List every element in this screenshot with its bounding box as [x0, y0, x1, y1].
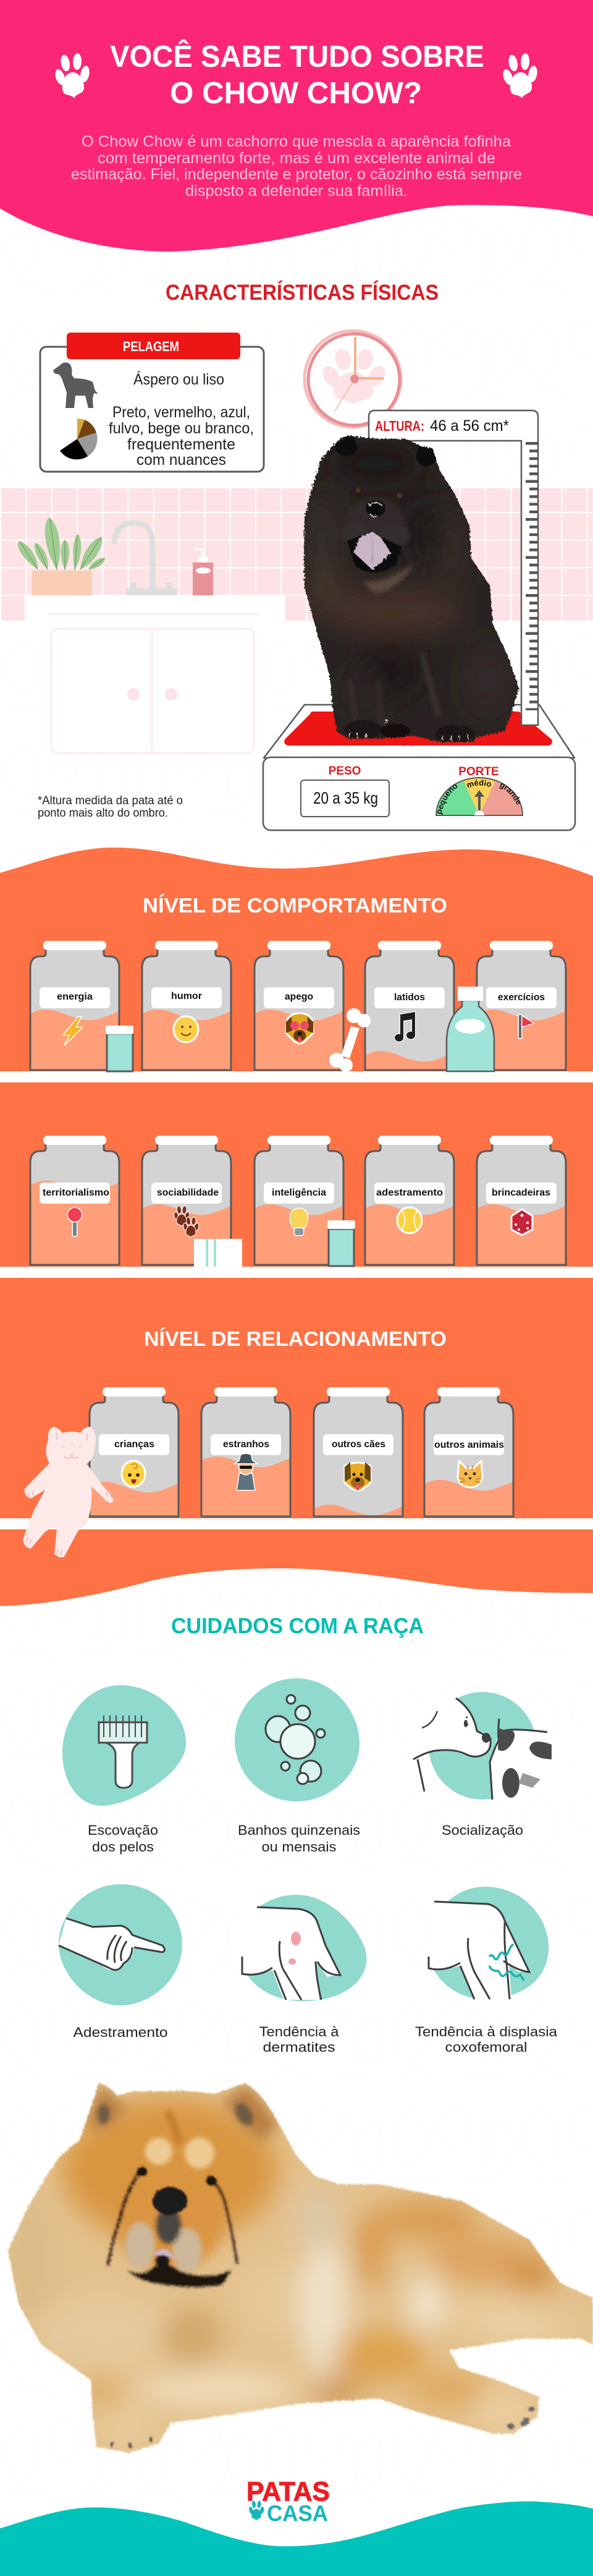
footer wave — [0, 2501, 593, 2576]
jar: estranhos — [200, 1387, 292, 1517]
jar: outros cães: outros cães — [332, 1439, 385, 1450]
title: O CHOW CHOW? — [170, 77, 422, 110]
title — [110, 40, 484, 110]
clock — [305, 331, 401, 427]
icon: flag — [519, 1015, 533, 1038]
ears — [335, 436, 357, 456]
logo: patas da casa: PATAS — [246, 2476, 330, 2507]
label: coxofemoral — [445, 2039, 528, 2055]
heading: características físicas: CARACTERÍSTICAS FÍSICAS — [166, 280, 439, 305]
label: Tendência à displasia — [415, 2024, 558, 2039]
label: dos pelos — [92, 1839, 154, 1855]
label — [238, 1822, 360, 1855]
jar: apego: apego — [285, 992, 313, 1002]
jar: outros animais: outros animais — [434, 1440, 504, 1450]
jar: brincadeiras — [476, 1136, 567, 1266]
label — [88, 1822, 158, 1855]
label: Banhos quinzenais — [238, 1822, 360, 1838]
icon: dog silhouette — [53, 362, 98, 408]
muzzle and brow folds — [117, 2181, 222, 2270]
head orange — [62, 2099, 278, 2241]
heading: cuidados com a raça: CUIDADOS COM A RAÇA — [171, 1614, 424, 1638]
scale base — [262, 704, 576, 831]
porte gauge: médio — [467, 780, 491, 788]
jar: crianças: crianças — [114, 1439, 154, 1450]
jar: latidos: latidos — [394, 992, 425, 1003]
icon: smile — [174, 1016, 198, 1042]
front leg — [334, 2329, 426, 2381]
jar: territorialismo: territorialismo — [43, 1188, 109, 1198]
icon: right paw — [500, 51, 541, 100]
bathroom wall scene — [0, 488, 593, 753]
header banner — [0, 0, 593, 252]
logo: patas da casa — [246, 2476, 330, 2526]
care: dermatite — [238, 1895, 366, 2055]
eyes — [137, 2167, 148, 2177]
decor: striped box — [194, 1239, 242, 1267]
icon: pointing hand — [59, 1918, 164, 1971]
jar: sociabilidade — [141, 1136, 232, 1266]
jar: outros animais — [424, 1387, 514, 1517]
tongue — [353, 532, 391, 570]
jar: apego — [253, 941, 345, 1071]
icon: dog face — [345, 1462, 371, 1491]
label: Escovação — [88, 1822, 158, 1838]
plant — [18, 517, 105, 595]
eyes and nose — [356, 487, 361, 493]
jar: humor: humor — [171, 991, 202, 1001]
intro paragraph: O Chow Chow é um cachorro que mescla a aparência fofinha — [82, 133, 511, 150]
colour text — [109, 404, 254, 469]
faucet — [114, 523, 177, 595]
footnote: ponto mais alto do ombro. — [38, 807, 168, 820]
icon: cat face — [458, 1461, 482, 1487]
icon: pin — [68, 1208, 82, 1236]
tongue — [153, 2249, 175, 2259]
icon: die — [511, 1209, 532, 1235]
chest tuft — [364, 563, 414, 593]
porte gauge: pequeno — [437, 784, 457, 815]
icon: left paw — [52, 51, 93, 100]
ears — [86, 2085, 278, 2142]
label: Adestramento — [73, 2025, 168, 2040]
photo: golden chow chow — [0, 2077, 593, 2460]
label — [259, 2024, 339, 2055]
colour text: com nuances — [137, 451, 226, 469]
cream band — [301, 2232, 348, 2380]
jar: exercícios: exercícios — [498, 992, 545, 1003]
icon: bulb — [290, 1209, 308, 1235]
soap bottle — [193, 548, 213, 595]
care: displasia — [415, 1887, 558, 2055]
decor: teal cup 2 — [327, 1220, 355, 1266]
footnote: *Altura medida da pata até o — [38, 794, 183, 807]
decor: bone — [329, 1008, 371, 1072]
colour text: fulvo, bege ou branco, — [109, 420, 254, 437]
footnote — [38, 794, 183, 820]
label: dermatites — [263, 2039, 335, 2055]
icon: paws — [174, 1206, 200, 1237]
decor: teddy bear — [23, 1427, 114, 1557]
colour text: Preto, vermelho, azul, — [112, 404, 250, 421]
care: adestramento — [59, 1884, 182, 2040]
photo: black chow chow — [296, 433, 531, 748]
jar: crianças — [89, 1387, 179, 1517]
care: escovação — [62, 1685, 186, 1855]
claws — [349, 720, 468, 741]
cabinet — [51, 629, 254, 753]
panel: pelagem — [40, 333, 264, 472]
icon: dog leg with spots — [238, 1907, 340, 2000]
jar: outros cães — [313, 1387, 404, 1517]
shelf 1 — [0, 1071, 593, 1082]
icon: colour pie — [60, 419, 98, 459]
intro paragraph: com temperamento forte, mas é um excelente animal de — [98, 150, 495, 167]
heading: nível de relacionamento: NÍVEL DE RELACIONAMENTO — [144, 1327, 447, 1350]
peso: PESO — [329, 765, 361, 778]
height ruler — [369, 410, 538, 725]
peso — [301, 765, 389, 817]
jar: adestramento: adestramento — [376, 1188, 443, 1198]
mane and chest — [6, 2195, 56, 2331]
dark creases — [108, 2167, 143, 2266]
height ruler: 46 a 56 cm* — [430, 417, 509, 435]
heading: nível de comportamento: NÍVEL DE COMPORTAMENTO — [143, 894, 447, 917]
icon: lightning — [64, 1017, 82, 1045]
jar: estranhos: estranhos — [223, 1439, 269, 1450]
decor: teal cup — [106, 1026, 133, 1071]
jar: energia: energia — [57, 992, 93, 1002]
paws — [344, 720, 476, 742]
mouth — [347, 536, 402, 572]
jar: humor — [141, 941, 232, 1071]
care: banhos — [235, 1678, 360, 1855]
muzzle — [345, 498, 405, 543]
shelf 3 — [0, 1518, 593, 1529]
jar: latidos — [364, 941, 455, 1071]
icon: hip — [428, 1902, 529, 1999]
panel: pelagem: PELAGEM — [123, 339, 179, 354]
nose — [152, 2187, 188, 2215]
mouth band — [127, 2264, 232, 2287]
panel: orange band — [0, 848, 593, 1606]
icon: dog with heart eyes — [286, 1013, 313, 1044]
care: socialização — [408, 1692, 552, 1838]
icon: ball — [397, 1207, 422, 1233]
left dog — [408, 1697, 492, 1759]
jar: exercícios — [476, 941, 567, 1071]
icon: baby — [122, 1461, 145, 1487]
coat type text: Áspero ou liso — [133, 370, 224, 388]
label: Tendência à — [259, 2024, 339, 2039]
intro paragraph: estimação. Fiel, independente e protetor, o cãozinho está sempre — [71, 166, 522, 183]
icon: brush — [99, 1715, 147, 1788]
colour text: frequentemente — [127, 436, 235, 453]
decor: teal bottle — [447, 987, 494, 1071]
label: Socialização — [442, 1822, 523, 1838]
icon: music note — [395, 1012, 415, 1042]
porte gauge: grande — [499, 783, 520, 805]
intro paragraph — [71, 133, 522, 200]
peso: 20 a 35 kg — [313, 789, 378, 807]
porte gauge: PORTE — [458, 765, 499, 778]
porte gauge — [435, 765, 523, 816]
jar: adestramento — [364, 1136, 455, 1266]
icon: bubbles — [266, 1695, 325, 1784]
icon: spy — [236, 1454, 256, 1490]
jar: inteligência — [253, 1136, 345, 1266]
jar: territorialismo — [30, 1136, 120, 1266]
jar: inteligência: inteligência — [272, 1188, 326, 1198]
title: VOCÊ SABE TUDO SOBRE — [110, 40, 484, 74]
logo: patas da casa: CASA — [267, 2501, 328, 2526]
jar: brincadeiras: brincadeiras — [492, 1188, 550, 1198]
shelf 2 — [0, 1267, 593, 1278]
jar: energia — [30, 941, 120, 1071]
jar: sociabilidade: sociabilidade — [157, 1188, 219, 1198]
height ruler: ALTURA: — [375, 418, 424, 434]
label: ou mensais — [262, 1839, 336, 1855]
label — [415, 2024, 558, 2055]
right dog — [490, 1730, 552, 1800]
intro paragraph: disposto a defender sua família. — [185, 182, 408, 200]
toes — [111, 2437, 151, 2448]
body — [374, 2201, 479, 2238]
